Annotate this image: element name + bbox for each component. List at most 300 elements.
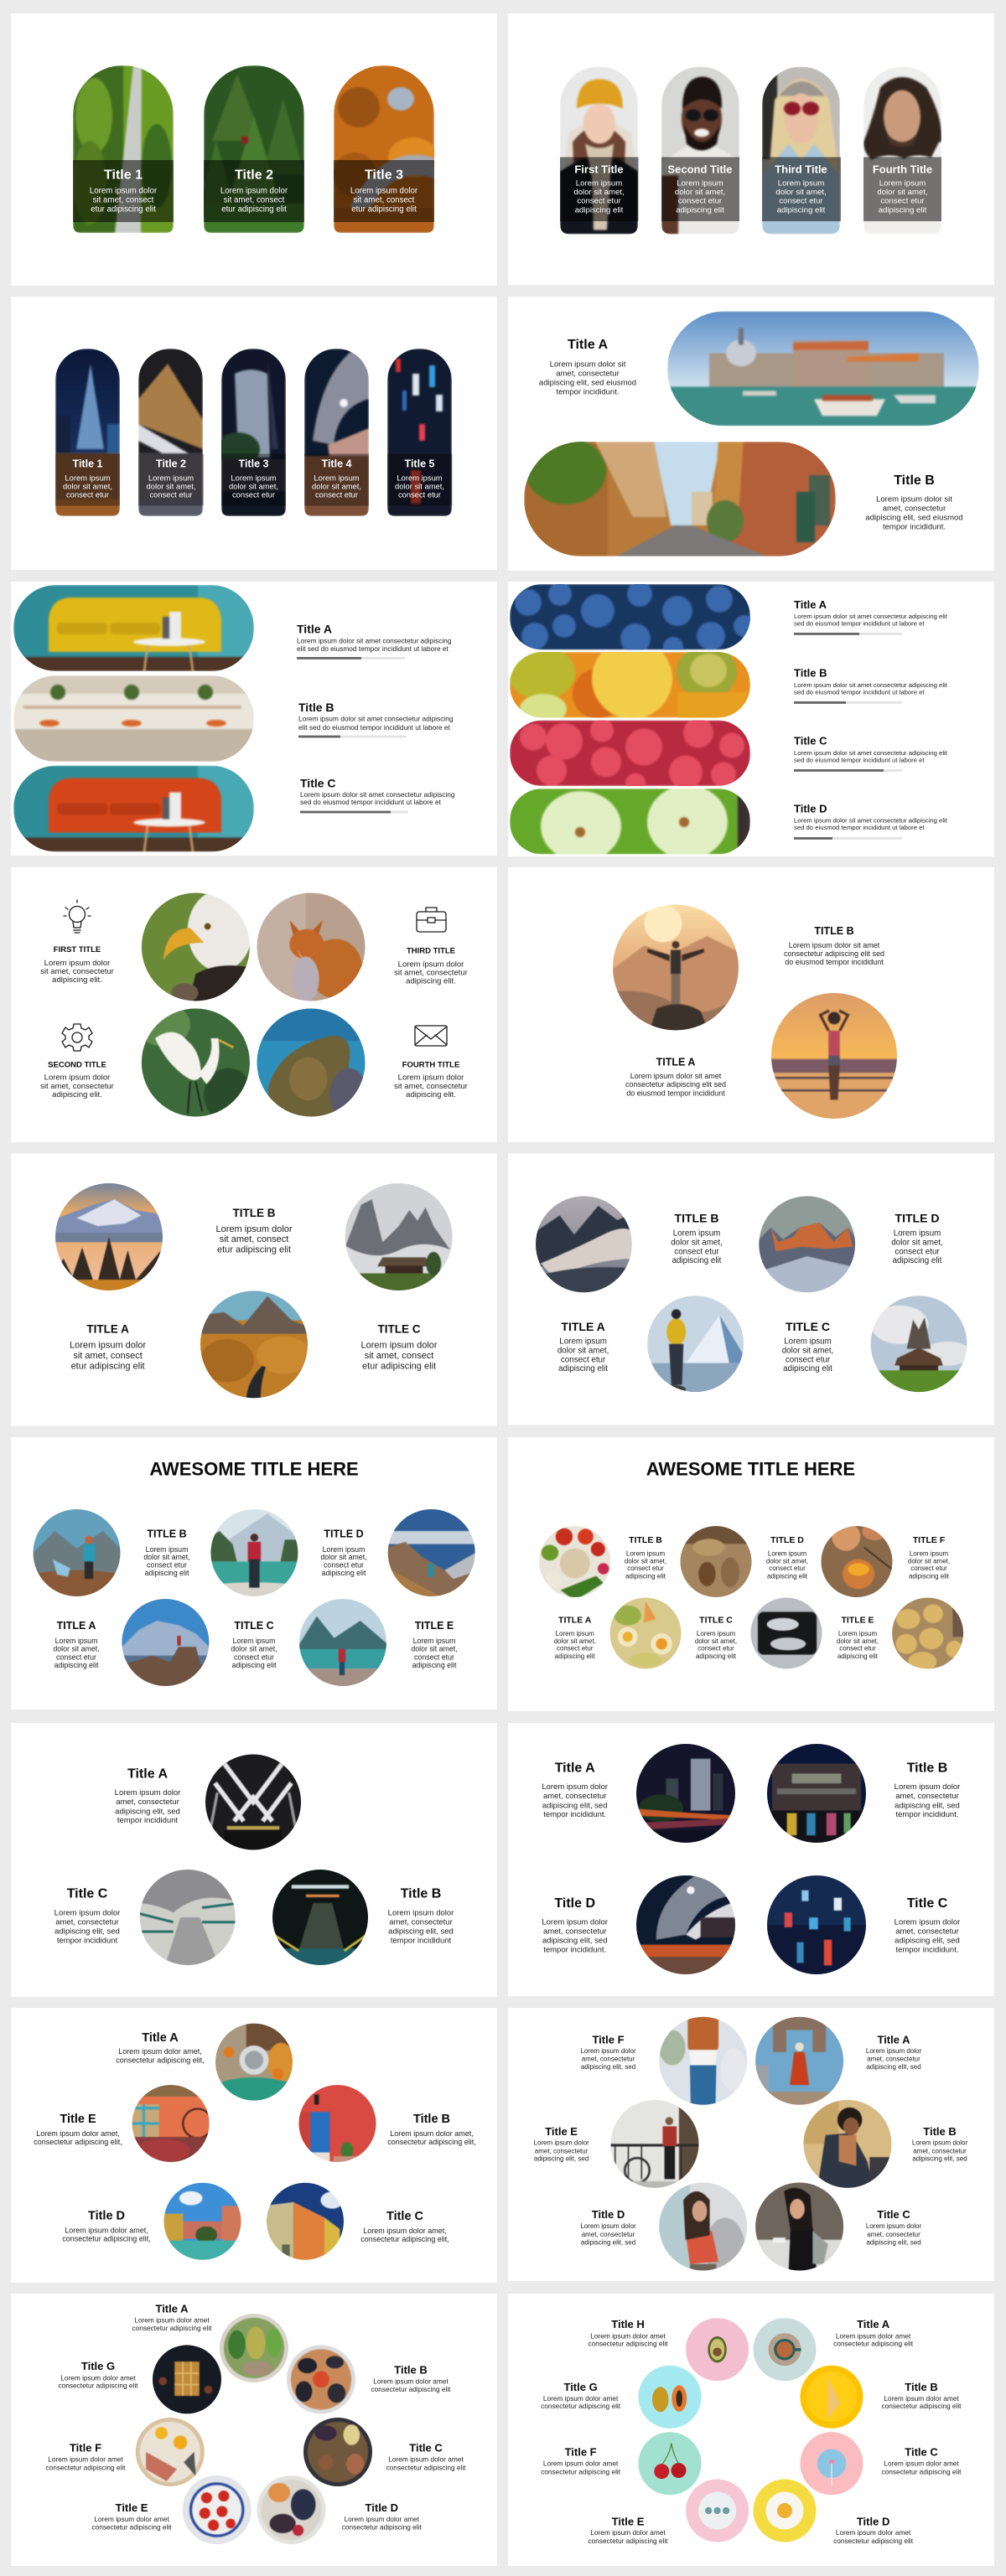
text: title 1 xyxy=(90,168,158,215)
text: title A: adipiscing elit, sed eiusmod xyxy=(539,379,636,387)
photo: woman in coral top xyxy=(655,2178,751,2279)
photo: coffee on sage xyxy=(750,2315,819,2384)
text and bar: fruit title C: Lorem ipsum dolor sit amet consectetur adipiscing elit xyxy=(794,749,948,757)
photo: curved night bridge xyxy=(304,349,369,516)
text and bar: fruit title D: Title D xyxy=(794,803,827,815)
text: title A: TITLE A xyxy=(57,1620,96,1632)
text: title A: dolor sit amet, xyxy=(53,1645,100,1653)
text: title A: Lorem ipsum dolor sit amet xyxy=(630,1072,722,1080)
text: title 2: Lorem ipsum dolor xyxy=(220,186,288,196)
text: night title A: Title A xyxy=(555,1761,595,1775)
text: title C: Lorem ipsum xyxy=(784,1337,832,1346)
text: title B: amet, consectetur xyxy=(883,504,946,513)
text: food title E xyxy=(837,1616,879,1660)
text: title A: etur adipiscing elit xyxy=(71,1361,145,1371)
photo: raspberries xyxy=(510,721,750,786)
photo: broken egg xyxy=(817,1523,896,1601)
text: title B xyxy=(388,1887,454,1946)
text: title D xyxy=(62,2209,151,2242)
text: city title 3 xyxy=(229,458,278,499)
text: pastel title F: Title F xyxy=(565,2445,597,2459)
panel: seven food plates ring xyxy=(11,2294,497,2566)
text: night title D: Lorem ipsum dolor xyxy=(542,1917,608,1927)
text: city title 3: consect etur xyxy=(232,489,275,499)
text: title 3: Lorem ipsum dolor xyxy=(350,186,418,196)
text: night title A xyxy=(542,1761,608,1819)
text: food title B: adipiscing elit xyxy=(625,1572,666,1580)
text: fourth title: Fourth Title xyxy=(873,163,932,176)
text: food title A: consect etur xyxy=(557,1644,594,1653)
photo: autumn valley road xyxy=(200,1291,308,1398)
photo: red wall and doorway xyxy=(295,2081,380,2166)
text: title B: Lorem ipsum dolor sit amet xyxy=(789,941,880,949)
text: title A xyxy=(115,1766,180,1825)
photo: red fox xyxy=(257,893,366,1001)
panel: two wide pill photos xyxy=(508,297,994,571)
text: title E: amet, consectetur xyxy=(535,2147,589,2155)
photo: hiker in yellow by lake xyxy=(642,1291,749,1397)
text: title C: consect etur xyxy=(786,1356,831,1364)
text: city title 1: Title 1 xyxy=(73,458,102,469)
panel: animals with icons xyxy=(11,867,497,1142)
text: title C: adipiscing elit xyxy=(783,1364,832,1373)
photo: woman on sunset beach xyxy=(771,993,897,1119)
text: title F: adipiscing elit, sed xyxy=(581,2063,635,2071)
text: food title F: TITLE F xyxy=(913,1535,946,1545)
photo: amsterdam night reflection xyxy=(762,1739,871,1848)
text: fourth title: consect etur xyxy=(880,196,925,206)
text: title A xyxy=(866,2033,921,2071)
text: pastel title B: Title B xyxy=(905,2381,938,2393)
text: title A: Lorem ipsum dolor amet, xyxy=(118,2047,202,2056)
text: night title B: Lorem ipsum dolor xyxy=(895,1782,960,1792)
text: title A: Lorem ipsum dolor xyxy=(115,1788,180,1798)
text: pastel title G xyxy=(541,2381,621,2410)
text: title 3: Title 3 xyxy=(365,168,403,183)
text: title A: tempor incididunt xyxy=(117,1816,179,1825)
text: title E: consect etur xyxy=(414,1653,454,1661)
photo: woman on brooklyn bridge xyxy=(751,2013,848,2109)
text: title B: etur adipiscing elit xyxy=(217,1245,291,1255)
text: first title xyxy=(573,163,625,215)
text: title 1: Title 1 xyxy=(104,168,143,183)
text: night title D: adipiscing elit, sed xyxy=(542,1936,608,1946)
icon: gear xyxy=(62,1024,92,1051)
photo: subway stairs xyxy=(267,1865,373,1970)
text: title C xyxy=(360,2210,449,2243)
text: title C: consectetur adipiscing elit xyxy=(386,2464,466,2472)
text: third title: adipiscing elit xyxy=(777,206,826,215)
text: title D: consect etur xyxy=(895,1247,940,1257)
text: first title: Lorem ipsum dolor xyxy=(44,959,110,968)
text and bar: title B: Title B xyxy=(298,701,334,714)
text: food title D: consect etur xyxy=(769,1565,806,1572)
text: pastel title E: Lorem ipsum dolor amet xyxy=(590,2528,666,2537)
text: title F: Title F xyxy=(592,2033,625,2046)
text: title D: dolor sit amet, xyxy=(320,1553,367,1561)
text: night title C: Lorem ipsum dolor xyxy=(895,1917,960,1927)
text: third title: consect etur xyxy=(779,196,823,206)
text: title B: Title B xyxy=(923,2125,957,2138)
text: title D: Lorem ipsum xyxy=(894,1229,941,1239)
text: title B: consect etur xyxy=(674,1247,719,1257)
text: title C: Lorem ipsum dolor xyxy=(866,2222,921,2230)
text: title A xyxy=(539,338,636,397)
text: city title 4 xyxy=(312,458,361,499)
text: first title: dolor sit amet, xyxy=(573,188,625,197)
text: night title A: adipiscing elit, sed xyxy=(542,1801,608,1810)
text: title E: adipiscing elit, sed xyxy=(534,2155,589,2162)
photo: venice canal xyxy=(667,311,979,426)
text: title A: amet, consectetur xyxy=(556,369,620,379)
text: title E: Lorem ipsum dolor xyxy=(533,2139,589,2147)
text: food title F: dolor sit amet, xyxy=(908,1557,950,1565)
text: title C: TITLE C xyxy=(786,1320,830,1333)
text: title C xyxy=(386,2442,466,2472)
heading: AWESOME TITLE HERE xyxy=(149,1458,359,1480)
text: title A: adipiscing elit, sed xyxy=(866,2063,921,2071)
text: title F: amet, consectetur xyxy=(582,2055,635,2063)
photo: green pine forest xyxy=(195,65,304,233)
photo: vegetables and beans xyxy=(536,1523,614,1601)
text and bar: title A: elit sed do eiusmod tempor incididunt ut labore et xyxy=(297,644,449,653)
text: title B xyxy=(784,925,884,966)
photo: glass cylinder tower xyxy=(216,349,286,516)
text: second title: Second Title xyxy=(667,163,733,176)
text: third title: Third Title xyxy=(775,163,827,176)
photo: fish on black tray xyxy=(747,1594,826,1673)
text: city title 5 xyxy=(395,458,444,499)
text: pastel title D xyxy=(833,2515,914,2545)
text: second title: consect etur xyxy=(678,196,723,206)
text: pastel title A: Lorem ipsum dolor amet xyxy=(836,2331,911,2340)
text: title E xyxy=(533,2125,589,2162)
text: first title: Lorem ipsum xyxy=(576,179,622,188)
text: title C: tempor incididunt xyxy=(57,1936,118,1946)
photo: canal with colorful buildings xyxy=(160,2179,245,2263)
photo: snowy mountain with pines xyxy=(55,1183,163,1291)
photo: misty dolomites with cabin xyxy=(345,1183,453,1291)
text: city title 4: Title 4 xyxy=(322,458,351,469)
text: title C: Lorem ipsum dolor amet, xyxy=(363,2227,447,2235)
text: title B: consectetur adipiscing elit sed xyxy=(784,949,884,958)
text: food title B: dolor sit amet, xyxy=(625,1557,666,1565)
photo: night skyscrapers xyxy=(631,1739,740,1850)
text: city title 3: dolor sit amet, xyxy=(229,481,278,491)
text: title A xyxy=(132,2302,212,2332)
text: food title B: TITLE B xyxy=(629,1535,662,1545)
photo: lit subway ceiling xyxy=(200,1750,306,1856)
text: title A: adipiscing elit xyxy=(54,1661,99,1669)
text: title D: Title D xyxy=(88,2209,125,2222)
text: food title F: Lorem ipsum xyxy=(910,1550,948,1557)
photo: avocado bowl xyxy=(216,2310,292,2386)
text: night title D: amet, consectetur xyxy=(543,1927,606,1936)
text: city title 1: dolor sit amet, xyxy=(63,481,112,491)
text: city title 5: Lorem ipsum xyxy=(397,473,443,483)
photo: backpacker xyxy=(655,2013,751,2109)
text: title C: amet, consectetur xyxy=(867,2231,920,2238)
text: title B: TITLE B xyxy=(675,1212,718,1225)
text: title C xyxy=(231,1620,277,1669)
photo: lemon on yellow plate xyxy=(750,2476,819,2545)
text: third title: dolor sit amet, xyxy=(775,188,827,197)
text: night title B: amet, consectetur xyxy=(895,1792,959,1801)
text: title C: TITLE C xyxy=(377,1322,421,1336)
text: title B xyxy=(671,1212,723,1265)
text: title B: amet, consectetur xyxy=(389,1917,453,1927)
photo: cabin under misty peak xyxy=(866,1291,972,1397)
text: title B: Lorem ipsum dolor xyxy=(215,1224,293,1234)
text: night title D xyxy=(542,1896,608,1954)
text: city title 2: Lorem ipsum xyxy=(148,473,194,483)
text: title A: TITLE A xyxy=(561,1320,605,1333)
text: third title xyxy=(394,947,468,985)
text: third title: Lorem ipsum dolor xyxy=(398,960,464,969)
text: city title 5: dolor sit amet, xyxy=(395,481,444,491)
text: title D: Lorem ipsum xyxy=(323,1545,365,1554)
text: food title D: Lorem ipsum xyxy=(768,1550,806,1557)
text: title B: Lorem ipsum dolor amet xyxy=(373,2377,449,2385)
text: title E: Title E xyxy=(116,2501,148,2514)
text: first title: First Title xyxy=(574,163,624,176)
photo: curved bridge at night xyxy=(631,1870,740,1979)
text: title 3 xyxy=(350,168,418,215)
text: food title D: dolor sit amet, xyxy=(766,1557,808,1565)
text and bar: fruit title C: sed do eiusmod tempor incididunt ut labore et xyxy=(794,756,925,763)
text: title B: amet, consectetur xyxy=(913,2147,967,2155)
text: title B: adipiscing elit, sed eiusmod xyxy=(865,513,963,523)
photo: orange wall with wheel xyxy=(128,2081,213,2166)
text: food title B xyxy=(625,1535,666,1580)
text and bar: title C xyxy=(300,776,455,813)
text: title A xyxy=(70,1322,146,1371)
text: city title 2: Title 2 xyxy=(156,458,186,469)
text and bar: fruit title B: Title B xyxy=(794,667,827,679)
icon: briefcase xyxy=(417,908,446,932)
text and bar: fruit title C xyxy=(794,734,948,772)
text: title D: Title D xyxy=(366,2501,398,2514)
panel: six people circles ring xyxy=(508,2008,994,2281)
panel: three sofa pills with progress bars xyxy=(11,582,497,856)
text: title B xyxy=(912,2125,967,2162)
text: third title: sit amet, consectetur xyxy=(394,969,468,977)
text: title G: consectetur adipiscing elit xyxy=(58,2382,138,2390)
photo: berries and granola xyxy=(253,2472,329,2548)
photo: waffle on dark plate xyxy=(149,2341,225,2417)
text: pastel title A: consectetur adipiscing elit xyxy=(833,2340,914,2348)
panel: eight pastel food circles ring xyxy=(508,2294,994,2566)
photo: marine iguana xyxy=(257,1009,366,1116)
text: second title xyxy=(667,163,733,215)
text: food title E: dolor sit amet, xyxy=(837,1637,879,1645)
text: title A: consect etur xyxy=(56,1653,96,1661)
photo: orange autumn forest xyxy=(333,65,438,233)
band: caption overlays xyxy=(55,454,453,506)
text and bar: title A: Lorem ipsum dolor sit amet consectetur adipiscing xyxy=(297,636,452,644)
text and bar: fruit title C: Title C xyxy=(794,734,827,747)
photo: traffic blur xyxy=(762,1870,871,1979)
text: title A: Lorem ipsum dolor xyxy=(70,1341,146,1351)
text: night title B: tempor incididunt. xyxy=(896,1810,958,1819)
text: title B xyxy=(371,2363,451,2393)
photo: macarons on pink plate xyxy=(682,2476,752,2545)
text: food title A: TITLE A xyxy=(558,1616,592,1626)
text: title F: Lorem ipsum dolor xyxy=(580,2047,636,2055)
text and bar: title B: elit sed do eiusmod tempor incididunt ut labore et xyxy=(298,723,450,732)
photo: cafe interior xyxy=(13,675,254,762)
photo: traffic lights xyxy=(387,349,452,516)
text: first title: sit amet, consectetur xyxy=(40,967,114,976)
text: food title C: TITLE C xyxy=(699,1616,733,1626)
panel: four night city circles xyxy=(508,1723,994,1996)
text: title A: Lorem ipsum dolor xyxy=(866,2047,921,2055)
text: pastel title F: consectetur adipiscing elit xyxy=(541,2467,621,2475)
photo: egg salad xyxy=(606,1594,685,1673)
text: pastel title H xyxy=(588,2318,668,2348)
text: first title: FIRST TITLE xyxy=(54,945,101,954)
text: title E xyxy=(91,2501,172,2531)
text: title E: Lorem ipsum dolor amet xyxy=(94,2515,169,2523)
text: night title C: amet, consectetur xyxy=(895,1927,959,1936)
photo: blonde woman in red sunglasses xyxy=(762,67,840,235)
text: title 3: sit amet, consect xyxy=(354,196,415,204)
text: food title F: consect etur xyxy=(910,1565,947,1572)
text: pastel title H: Lorem ipsum dolor amet xyxy=(590,2331,666,2340)
text: second title: sit amet, consectetur xyxy=(40,1082,114,1091)
text: title A: Lorem ipsum dolor sit xyxy=(550,360,626,369)
text: food title C: consect etur xyxy=(697,1644,734,1653)
panel: three mountain circles xyxy=(11,1153,497,1426)
text: title A: dolor sit amet, xyxy=(557,1346,609,1355)
text: title B: tempor incididunt. xyxy=(883,523,946,531)
band: dark caption overlays xyxy=(73,160,434,222)
text: title C: sit amet, consect xyxy=(365,1351,433,1361)
panel: five colorful circles ring xyxy=(11,2008,497,2283)
text: title A: Lorem ipsum xyxy=(55,1637,97,1645)
text: title 2: Title 2 xyxy=(235,168,273,183)
text: title F xyxy=(45,2442,126,2472)
text: food title E: Lorem ipsum xyxy=(838,1630,877,1637)
photo: hiker at sunrise xyxy=(613,905,739,1031)
text: fourth title: Lorem ipsum dolor xyxy=(398,1073,464,1083)
text: food title A: adipiscing elit xyxy=(555,1653,595,1660)
photo: figs and cheese board xyxy=(300,2414,376,2490)
text: city title 1: Lorem ipsum xyxy=(65,473,111,483)
text: title D xyxy=(342,2501,422,2531)
text: fourth title: adipiscing elit. xyxy=(406,1090,456,1099)
text: title C: Lorem ipsum xyxy=(233,1637,275,1645)
text and bar: fruit title D xyxy=(794,803,948,840)
text: title B: Lorem ipsum xyxy=(673,1229,720,1239)
text: second title: Lorem ipsum xyxy=(677,179,723,188)
photo: red sofa xyxy=(13,766,254,851)
text: title A: Lorem ipsum xyxy=(559,1337,607,1346)
text: night title A: amet, consectetur xyxy=(543,1792,606,1801)
text: title A: consectetur adipiscing elit, xyxy=(116,2056,205,2064)
text: title E xyxy=(411,1620,458,1669)
text: title D: adipiscing elit xyxy=(893,1256,942,1265)
panel: five arch city photos xyxy=(11,297,497,570)
text: title D: consect etur xyxy=(324,1561,364,1570)
photo: orange alpenglow peaks xyxy=(754,1192,860,1297)
text and bar: fruit title A: sed do eiusmod tempor incididunt ut labore et xyxy=(794,620,925,627)
text: pastel title C: Title C xyxy=(905,2445,938,2459)
text: pastel title H: consectetur adipiscing elit xyxy=(588,2340,668,2348)
text: title A xyxy=(625,1056,726,1098)
text: city title 4: dolor sit amet, xyxy=(312,481,361,491)
text: pastel title C: consectetur adipiscing elit xyxy=(881,2467,962,2475)
panel: four fruit pills with progress bars xyxy=(508,582,994,861)
photo: yellow sofa xyxy=(13,585,254,671)
photo: person at alpine lake xyxy=(295,1595,391,1690)
photo: woman with tablet xyxy=(751,2178,848,2275)
text: title A: do eiusmod tempor incididunt xyxy=(626,1089,725,1098)
text: pastel title E xyxy=(588,2515,668,2545)
text: title B: adipiscing elit, sed xyxy=(912,2155,967,2162)
text: title D xyxy=(580,2208,636,2246)
text and bar: title A: Title A xyxy=(297,622,332,635)
text: title C xyxy=(866,2208,921,2246)
text: pastel title B: consectetur adipiscing elit xyxy=(881,2402,962,2410)
text: title B: TITLE B xyxy=(233,1207,276,1219)
text: night title D: tempor incididunt. xyxy=(543,1946,606,1954)
text: title D: adipiscing elit, sed xyxy=(581,2238,635,2246)
text: title D xyxy=(891,1212,943,1265)
photo: venice houses xyxy=(262,2179,348,2263)
text: pastel title H: Title H xyxy=(611,2318,645,2330)
text: pastel title G: Lorem ipsum dolor amet xyxy=(543,2394,619,2403)
photo: girl in yellow hat xyxy=(560,67,638,235)
text: title B: do eiusmod tempor incididunt xyxy=(785,958,884,966)
photo: green scooter xyxy=(211,2020,297,2104)
photo: man with bike and fence xyxy=(606,2096,703,2192)
text: title E xyxy=(34,2113,122,2146)
text: title C: Title C xyxy=(409,2442,443,2454)
text: fourth title xyxy=(394,1061,468,1099)
text: pastel title D: consectetur adipiscing elit xyxy=(833,2537,914,2545)
photo: cherries on teal xyxy=(635,2429,704,2498)
text: food title E: adipiscing elit xyxy=(837,1653,879,1660)
text: title A: adipiscing elit xyxy=(558,1364,608,1373)
text: title D xyxy=(320,1529,367,1577)
text and bar: title C: Title C xyxy=(300,776,336,789)
text: food title E: TITLE E xyxy=(841,1616,874,1626)
icon: envelope xyxy=(415,1026,447,1046)
text: third title xyxy=(775,163,827,215)
text: title G: Title G xyxy=(81,2360,115,2372)
text: title B: tempor incididunt xyxy=(391,1936,452,1946)
text: title B: TITLE B xyxy=(814,925,854,937)
text: title B: dolor sit amet, xyxy=(143,1553,190,1561)
photo: bald eagle xyxy=(141,893,250,1001)
text: city title 2: dolor sit amet, xyxy=(147,481,195,491)
text: city title 4: Lorem ipsum xyxy=(314,473,360,483)
text: pastel title A xyxy=(833,2318,914,2348)
photo: forest road xyxy=(73,65,174,233)
heading: AWESOME TITLE HERE xyxy=(646,1458,855,1480)
text: title E: Lorem ipsum xyxy=(413,1637,455,1645)
text: title D: amet, consectetur xyxy=(582,2231,635,2238)
text: food title A: dolor sit amet, xyxy=(554,1637,596,1645)
text: title F xyxy=(580,2033,636,2071)
photo: smiling man with sunglasses xyxy=(661,67,739,235)
photo: fried eggs and bacon xyxy=(132,2414,208,2490)
photo: potatoes xyxy=(889,1594,967,1673)
text: third title: THIRD TITLE xyxy=(407,947,455,955)
text and bar: fruit title B: Lorem ipsum dolor sit amet consectetur adipiscing elit xyxy=(794,681,948,689)
text: title D: Lorem ipsum dolor amet xyxy=(345,2515,420,2523)
